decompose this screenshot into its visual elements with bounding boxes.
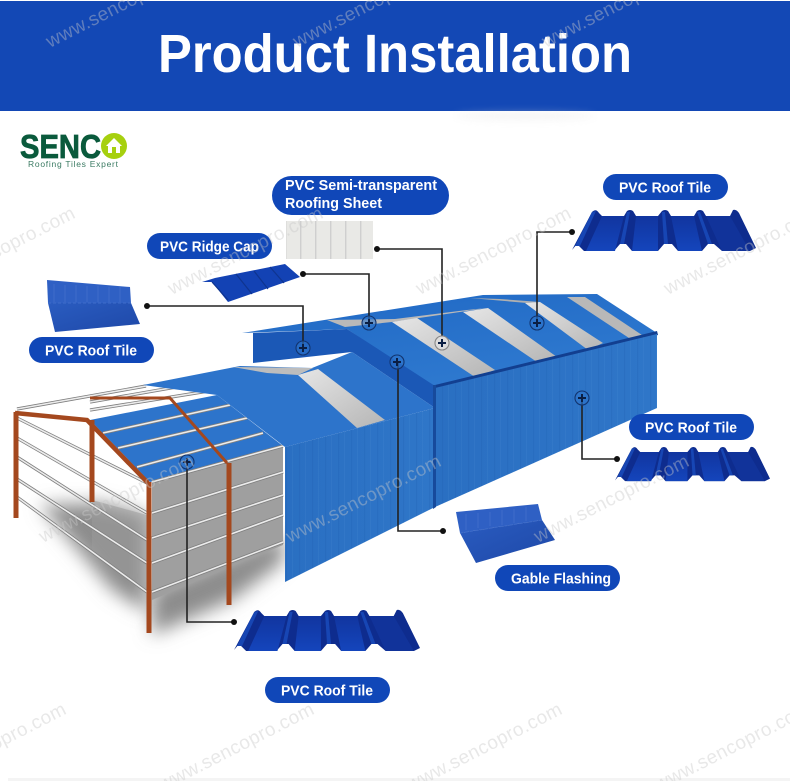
front side wall xyxy=(285,408,435,582)
label: PVC Ridge Cap xyxy=(147,233,272,259)
rear roof and back wall xyxy=(242,294,657,388)
building illustration xyxy=(15,294,658,635)
label: PVC Roof Tile, right: PVC Roof Tile xyxy=(645,420,737,436)
label: PVC Roof Tile, bottom xyxy=(265,677,390,703)
product image: ridge cap xyxy=(202,264,300,302)
label: PVC Semi-transparent Roofing Sheet: Roofing Sheet xyxy=(285,195,382,212)
label: PVC Roof Tile, left: PVC Roof Tile xyxy=(45,342,137,360)
label: Gable Flashing xyxy=(495,565,620,591)
watermarks: www.sencopro.com xyxy=(35,451,198,548)
target markers xyxy=(180,316,589,469)
long side wall xyxy=(435,334,657,507)
product image: gable flashing xyxy=(456,504,555,563)
label: PVC Ridge Cap: PVC Ridge Cap xyxy=(160,238,259,256)
watermarks: www.sencopro.com xyxy=(530,451,693,548)
label: PVC Semi-transparent Roofing Sheet: PVC Semi-transparent xyxy=(285,177,437,194)
steel frame section xyxy=(15,367,283,635)
label: PVC Roof Tile, top right: PVC Roof Tile xyxy=(619,180,711,196)
watermarks: www.sencopro.com xyxy=(164,203,327,300)
header banner xyxy=(0,1,790,111)
title: Product Installation xyxy=(158,24,632,84)
product image: roof tile, bottom xyxy=(234,610,420,651)
label: PVC Roof Tile, right xyxy=(629,414,754,440)
product image: roof tile, top right xyxy=(572,210,756,251)
connector lines xyxy=(147,232,617,622)
product image: flashing piece, top left xyxy=(47,280,140,332)
label: Gable Flashing: Gable Flashing xyxy=(511,570,611,588)
front roof xyxy=(143,352,435,447)
watermarks: www.sencopro.com xyxy=(412,203,575,300)
translucent skylight strips, upper roof xyxy=(327,297,645,377)
label: PVC Roof Tile, top right xyxy=(603,174,728,200)
logo: SENCO: Roofing Tiles Expert xyxy=(28,159,119,169)
watermarks: www.sencopro.com xyxy=(282,451,445,548)
connector end dots xyxy=(144,229,620,625)
label: PVC Semi-transparent Roofing Sheet xyxy=(272,176,449,215)
label: PVC Roof Tile, left xyxy=(29,337,154,363)
logo: SENCO: SENC xyxy=(20,128,101,165)
product image: roof tile, right xyxy=(615,447,770,481)
label: PVC Roof Tile, bottom: PVC Roof Tile xyxy=(281,682,373,700)
product image: semi-transparent sheet xyxy=(286,221,373,259)
